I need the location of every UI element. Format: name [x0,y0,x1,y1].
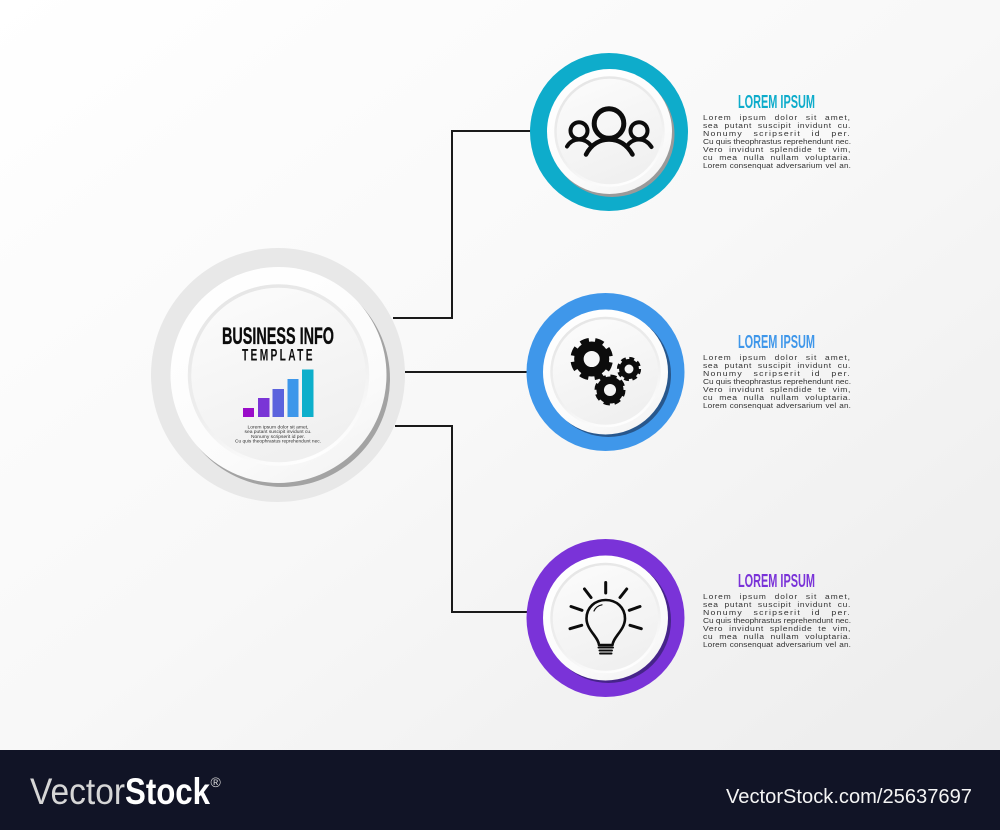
footer logo: Vector [30,771,125,812]
footer image id: VectorStock.com/25637697 [726,786,972,808]
panel: central business info circle [151,248,405,502]
footer bar [0,750,1000,830]
paragraph [703,113,851,170]
heading: business info: BUSINESS INFO [222,323,334,350]
paragraph: Cu quis theophrastus reprehendunt nec. [703,137,851,146]
central description text: Lorem ipsum dolor sit amet, [248,424,308,430]
footer logo [30,771,222,812]
paragraph: Vero invidunt splendide te vim, [703,624,851,633]
paragraph: cu mea nulla nullam voluptaria. [703,393,851,402]
subheading: template: TEMPLATE [242,345,315,364]
connector lines [393,131,531,612]
icon: gears [571,338,639,403]
paragraph: Vero invidunt splendide te vim, [703,145,851,154]
text block: purple node [703,571,851,649]
heading: LOREM IPSUM [738,92,815,112]
text block: blue node [703,332,851,410]
paragraph: cu mea nulla nullam voluptaria. [703,632,851,641]
paragraph [703,353,851,410]
paragraph: Lorem consenquat adversarium vel an. [703,161,851,170]
central description text: sea putant suscipit invidunt cu. [244,429,312,435]
heading: LOREM IPSUM [738,332,815,352]
central description text [235,424,321,444]
bar chart [243,370,314,417]
paragraph: cu mea nulla nullam voluptaria. [703,153,851,162]
paragraph: Lorem ipsum dolor sit amet, [703,592,851,601]
paragraph: Lorem consenquat adversarium vel an. [703,640,851,649]
panel: blue gears node [526,293,684,451]
panel: teal people node [530,53,688,211]
paragraph [703,592,851,649]
icon: lightbulb [570,582,641,654]
central description text: Nonumy scripserit id per. [251,434,305,440]
footer logo: Stock [125,771,210,812]
icon: people [567,109,652,154]
paragraph: Cu quis theophrastus reprehendunt nec. [703,377,851,386]
paragraph: Cu quis theophrastus reprehendunt nec. [703,616,851,625]
paragraph: Nonumy scripserit id per. [703,129,851,138]
paragraph: Lorem ipsum dolor sit amet, [703,113,851,122]
paragraph: sea putant suscipit invidunt cu. [703,121,851,130]
paragraph: Nonumy scripserit id per. [703,369,851,378]
heading: LOREM IPSUM [738,571,815,591]
paragraph: Lorem ipsum dolor sit amet, [703,353,851,362]
paragraph: Vero invidunt splendide te vim, [703,385,851,394]
footer logo: ® [210,774,222,790]
paragraph: sea putant suscipit invidunt cu. [703,361,851,370]
text block: teal node [703,92,851,170]
central description text: Cu quis theophrastus reprehendunt nec. [235,438,321,444]
paragraph: Lorem consenquat adversarium vel an. [703,401,851,410]
paragraph: sea putant suscipit invidunt cu. [703,600,851,609]
panel: purple lightbulb node [526,539,684,697]
paragraph: Nonumy scripserit id per. [703,608,851,617]
